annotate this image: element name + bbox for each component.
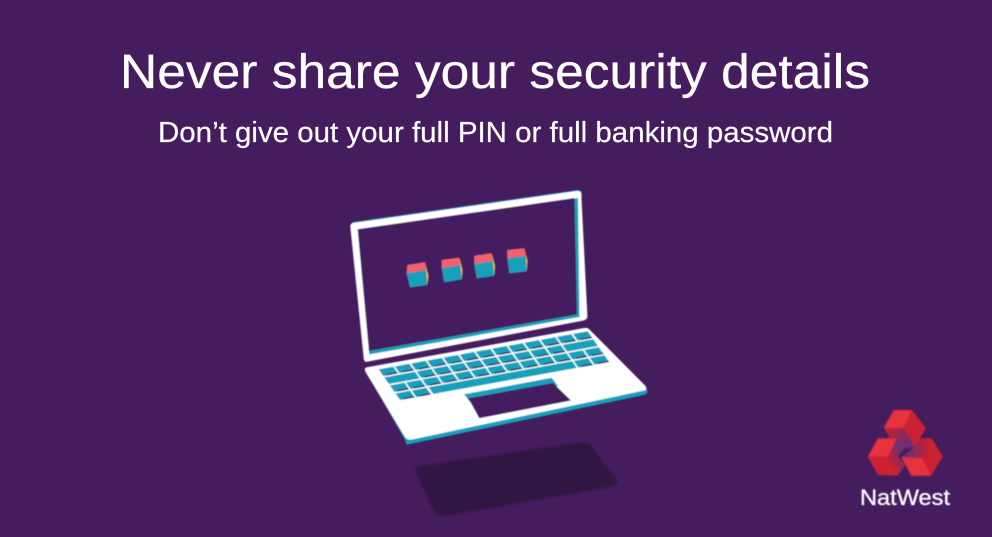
password cube 3 — [474, 253, 495, 278]
laptop shadow — [415, 442, 618, 516]
logo mark — [868, 410, 943, 476]
title: Never share your security details — [120, 46, 870, 99]
keyboard keys — [379, 331, 609, 400]
password dots on screen — [407, 248, 528, 287]
laptop illustration — [350, 190, 950, 510]
NatWest logo — [860, 410, 950, 510]
subtitle: Don’t give out your full PIN or full banking password — [158, 117, 833, 149]
laptop screen — [350, 190, 587, 362]
password cube 1 — [407, 262, 428, 287]
logo wordmark: NatWest — [860, 485, 950, 510]
laptop base — [365, 328, 647, 444]
trackpad — [464, 378, 571, 418]
password cube 2 — [442, 258, 462, 282]
password cube 4 — [507, 248, 528, 273]
